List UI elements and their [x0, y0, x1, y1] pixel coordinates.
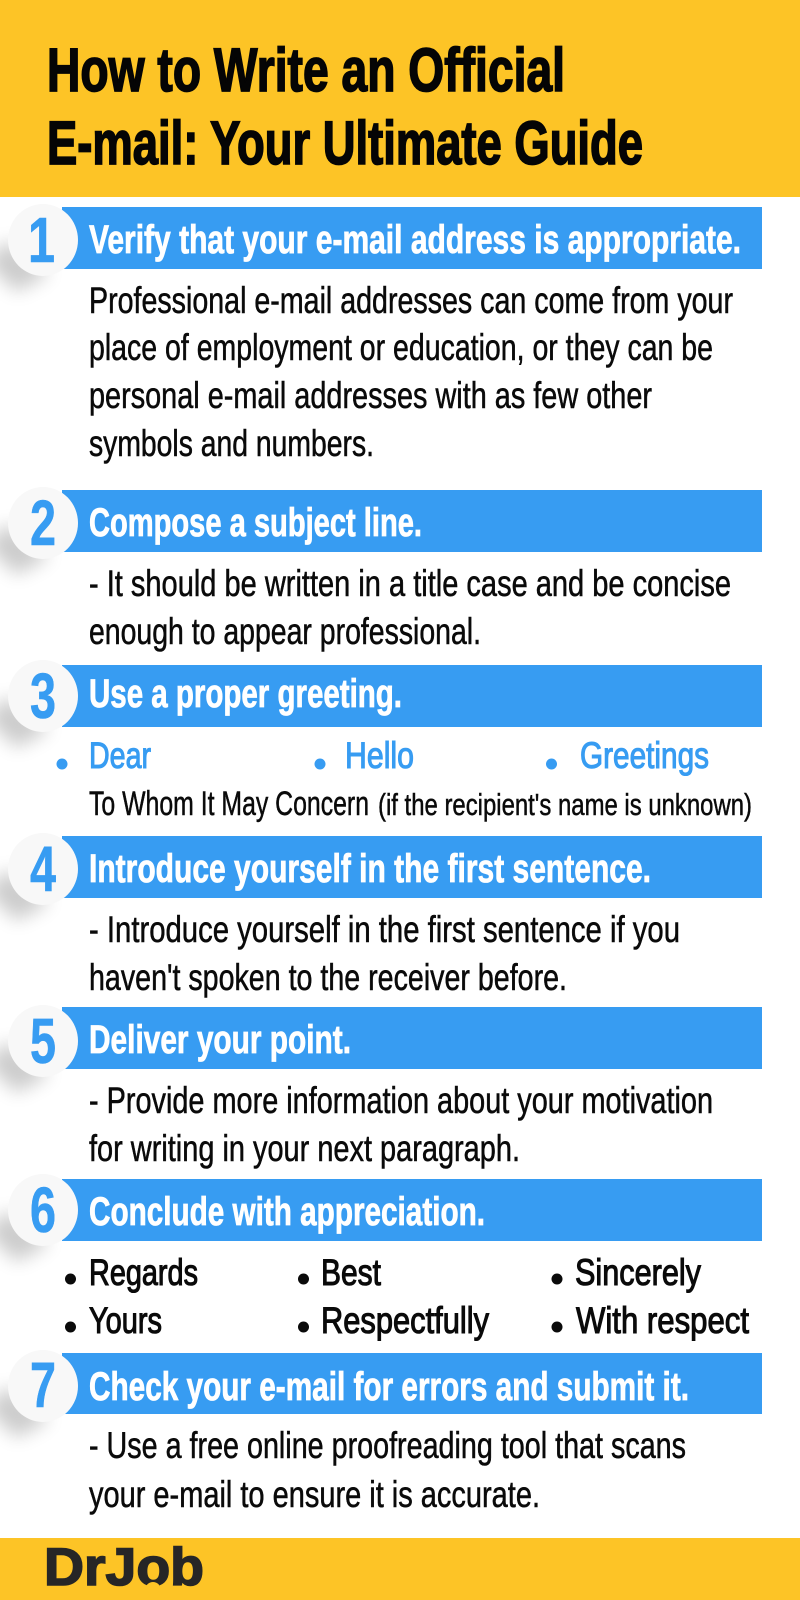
greeting options: Dear	[89, 734, 151, 776]
step 3 heading bar	[62, 665, 762, 727]
step 7 number badge	[0, 1349, 78, 1438]
step 1 number badge: 1	[28, 204, 55, 276]
greeting options: Greetings	[580, 734, 709, 776]
step 7 heading bar	[62, 1353, 762, 1414]
closing options: Yours	[89, 1299, 162, 1341]
greeting options	[56, 734, 709, 776]
step 1 body text	[89, 279, 733, 464]
step 4 number badge	[0, 833, 78, 921]
step 4 heading bar	[62, 836, 762, 898]
step 3 number badge: 3	[30, 660, 56, 732]
step 6 heading bar	[62, 1179, 762, 1241]
footer band	[0, 1538, 800, 1600]
closing options: Best	[321, 1251, 381, 1293]
closing options: Respectfully	[321, 1299, 489, 1341]
step 4 body text: haven't spoken to the receiver before.	[89, 956, 567, 998]
step 2 heading bar	[62, 490, 762, 552]
step 1 body text: symbols and numbers.	[89, 422, 374, 464]
step 7 body text: your e-mail to ensure it is accurate.	[89, 1473, 540, 1515]
step 1 body text: personal e-mail addresses with as few other	[89, 374, 652, 416]
step 4 number badge: 4	[30, 833, 56, 905]
step 2 number badge: 2	[30, 487, 56, 559]
step 3 heading bar: Use a proper greeting.	[89, 672, 402, 716]
closing options: Regards	[89, 1251, 198, 1293]
step 1 heading bar	[62, 207, 762, 269]
step 4 body text	[89, 908, 680, 998]
step 5 number badge	[0, 1005, 78, 1093]
step 5 heading bar	[62, 1007, 762, 1069]
greeting options: Hello	[345, 734, 414, 776]
step 5 body text	[89, 1079, 713, 1169]
step 1 number badge	[0, 204, 78, 292]
step 7 body text	[89, 1424, 686, 1515]
step 3 number badge	[0, 660, 78, 748]
step 6 number badge	[0, 1174, 78, 1262]
step 6 heading bar: Conclude with appreciation.	[89, 1190, 485, 1234]
step 7 number badge: 7	[30, 1349, 56, 1421]
step 2 heading bar: Compose a subject line.	[89, 501, 422, 545]
greeting note	[89, 785, 752, 823]
step 2 number badge	[0, 487, 78, 575]
panel: step 7	[0, 1349, 762, 1515]
greeting note: To Whom It May Concern	[89, 785, 369, 823]
logo: DrJob: DrJob	[44, 1538, 204, 1597]
panel: step 4	[0, 833, 762, 998]
step 5 body text: for writing in your next paragraph.	[89, 1127, 520, 1169]
panel: step 1	[0, 204, 762, 464]
panel: step 2	[0, 487, 762, 652]
closing options: Sincerely	[575, 1251, 701, 1293]
step 5 number badge: 5	[30, 1005, 56, 1077]
step 2 body text	[89, 562, 731, 652]
step 6 number badge: 6	[30, 1174, 56, 1246]
title	[47, 36, 643, 177]
panel: step 3	[0, 660, 762, 823]
step 5 heading bar: Deliver your point.	[89, 1018, 351, 1062]
closing options: With respect	[576, 1299, 749, 1341]
header band	[0, 0, 800, 197]
step 2 body text: enough to appear professional.	[89, 610, 481, 652]
panel: step 5	[0, 1005, 762, 1169]
closing options	[65, 1251, 749, 1341]
title: How to Write an Official	[47, 36, 565, 104]
panel: step 6	[0, 1174, 762, 1341]
